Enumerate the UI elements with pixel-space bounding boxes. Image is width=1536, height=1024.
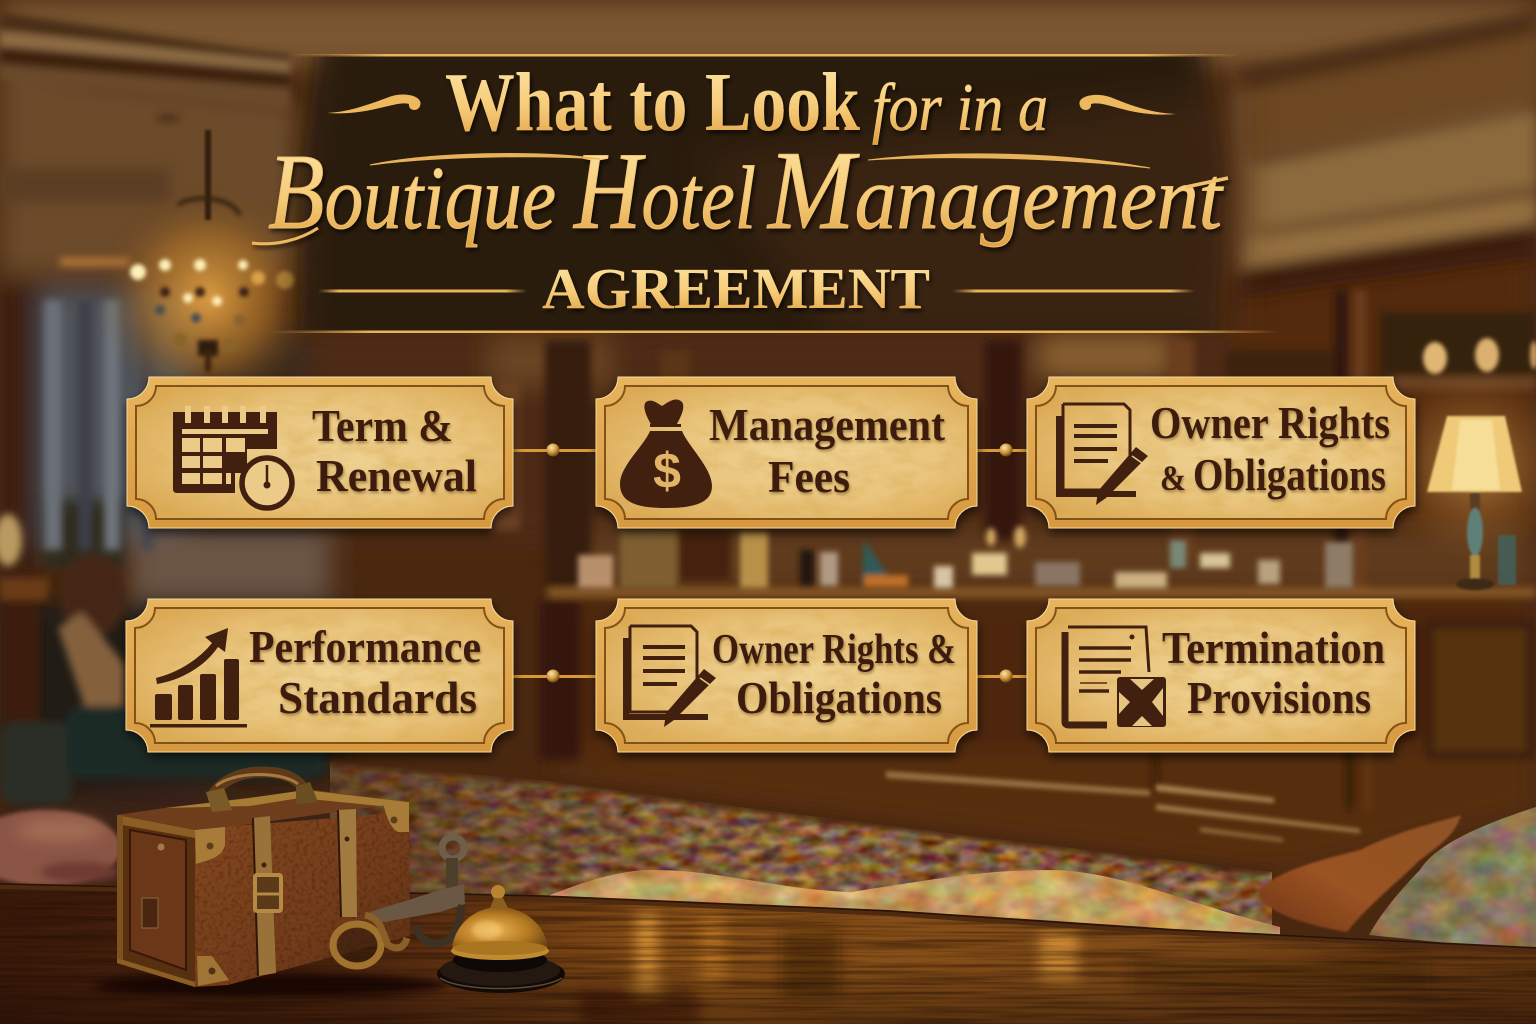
text: Management Fees xyxy=(709,399,946,502)
lamp glow xyxy=(1380,370,1536,560)
text: Management Fees: Management xyxy=(709,399,946,450)
suitcase xyxy=(95,772,445,997)
panel: Termination Provisions xyxy=(1027,599,1415,752)
text: Management Fees: Fees xyxy=(768,451,850,502)
wood panel stripes xyxy=(490,380,520,530)
text: Owner Rights and Obligations xyxy=(712,627,956,723)
connector: row 2 right xyxy=(975,670,1030,682)
title banner xyxy=(252,54,1274,333)
suitcase end face xyxy=(117,815,195,987)
suitcase top xyxy=(117,790,408,830)
icon: document with X xyxy=(1065,627,1166,727)
text: Owner Rights and Obligations: Owner Rights xyxy=(1150,397,1390,448)
cabinet ornaments xyxy=(1423,338,1536,374)
text: Termination Provisions: Provisions xyxy=(1187,672,1371,723)
icon: money bag xyxy=(620,399,712,508)
text: Term and Renewal: Renewal xyxy=(316,450,477,501)
straps xyxy=(253,816,276,976)
icon: bar chart with arrow xyxy=(150,628,247,728)
right pillows xyxy=(1258,807,1536,947)
table lamp xyxy=(1427,416,1522,590)
shelf lower xyxy=(548,588,1536,597)
text: Performance Standards xyxy=(249,621,481,723)
left flourish xyxy=(327,94,421,113)
connector: row 1 right xyxy=(975,444,1030,456)
text: Owner Rights and Obligations xyxy=(1150,397,1390,500)
title line 1: for in a xyxy=(872,69,1048,145)
shelf objects xyxy=(578,526,1353,588)
brass corners xyxy=(195,827,225,864)
panel: Owner Rights and Obligations (top) xyxy=(1027,377,1415,528)
wall base xyxy=(1153,750,1157,790)
left ceiling mouldings xyxy=(0,12,290,62)
ceiling and wall mouldings xyxy=(0,10,1536,570)
service bell xyxy=(437,885,565,993)
title line 2 script: Management xyxy=(766,129,1224,253)
chandelier xyxy=(103,130,313,403)
left seating xyxy=(60,553,126,637)
swash rules xyxy=(370,153,600,165)
title line 1: What to Look xyxy=(445,56,860,149)
buckle xyxy=(255,875,281,911)
text: Term and Renewal xyxy=(312,400,477,501)
text: Owner Rights and Obligations: Obligations xyxy=(1193,449,1386,500)
title line 2 script: Hotel xyxy=(572,130,756,252)
icon: calendar with clock xyxy=(173,406,292,508)
text: Termination Provisions: Termination xyxy=(1162,622,1385,673)
panel: Management Fees xyxy=(596,377,977,528)
text: Owner Rights and Obligations: & xyxy=(1160,458,1186,498)
top gold rule xyxy=(290,54,1240,56)
title line 2 script: Boutique xyxy=(268,133,556,252)
connector: row 2 left xyxy=(510,670,600,682)
right cabinet xyxy=(1335,290,1347,590)
text: Term and Renewal: Term & xyxy=(312,400,453,451)
panel: Performance Standards xyxy=(126,599,513,752)
curtain folds xyxy=(44,300,62,550)
carpet xyxy=(330,762,1272,925)
right flourish xyxy=(1079,95,1176,115)
icon: document and pencil xyxy=(626,626,716,727)
text: Performance Standards: Performance xyxy=(249,621,481,672)
icon: document and pencil xyxy=(1059,404,1148,505)
suitcase long side xyxy=(195,812,410,987)
bottom gold rule xyxy=(270,330,1280,333)
left pillow xyxy=(0,810,121,886)
text: Termination Provisions xyxy=(1162,622,1385,723)
panel: Term and Renewal xyxy=(127,377,513,528)
keys and anchor ornament xyxy=(333,837,465,966)
carpet back edge shadow xyxy=(330,762,1272,872)
text: Owner Rights and Obligations: Owner Rights & xyxy=(712,627,956,673)
connector: row 1 left xyxy=(510,444,600,456)
text: Performance Standards: Standards xyxy=(278,672,477,723)
agreement rules xyxy=(318,290,1195,292)
title line 3: AGREEMENT xyxy=(542,256,930,321)
wooden table xyxy=(0,880,1536,1024)
title line 2 script xyxy=(252,129,1228,253)
cushions xyxy=(550,870,1280,934)
icon: money bag: $ xyxy=(653,443,681,499)
wall base ledge highlights xyxy=(886,771,1360,842)
handle xyxy=(212,772,306,796)
panel: Owner Rights and Obligations (bottom) xyxy=(596,599,977,752)
text: Owner Rights and Obligations: Obligations xyxy=(736,672,942,723)
